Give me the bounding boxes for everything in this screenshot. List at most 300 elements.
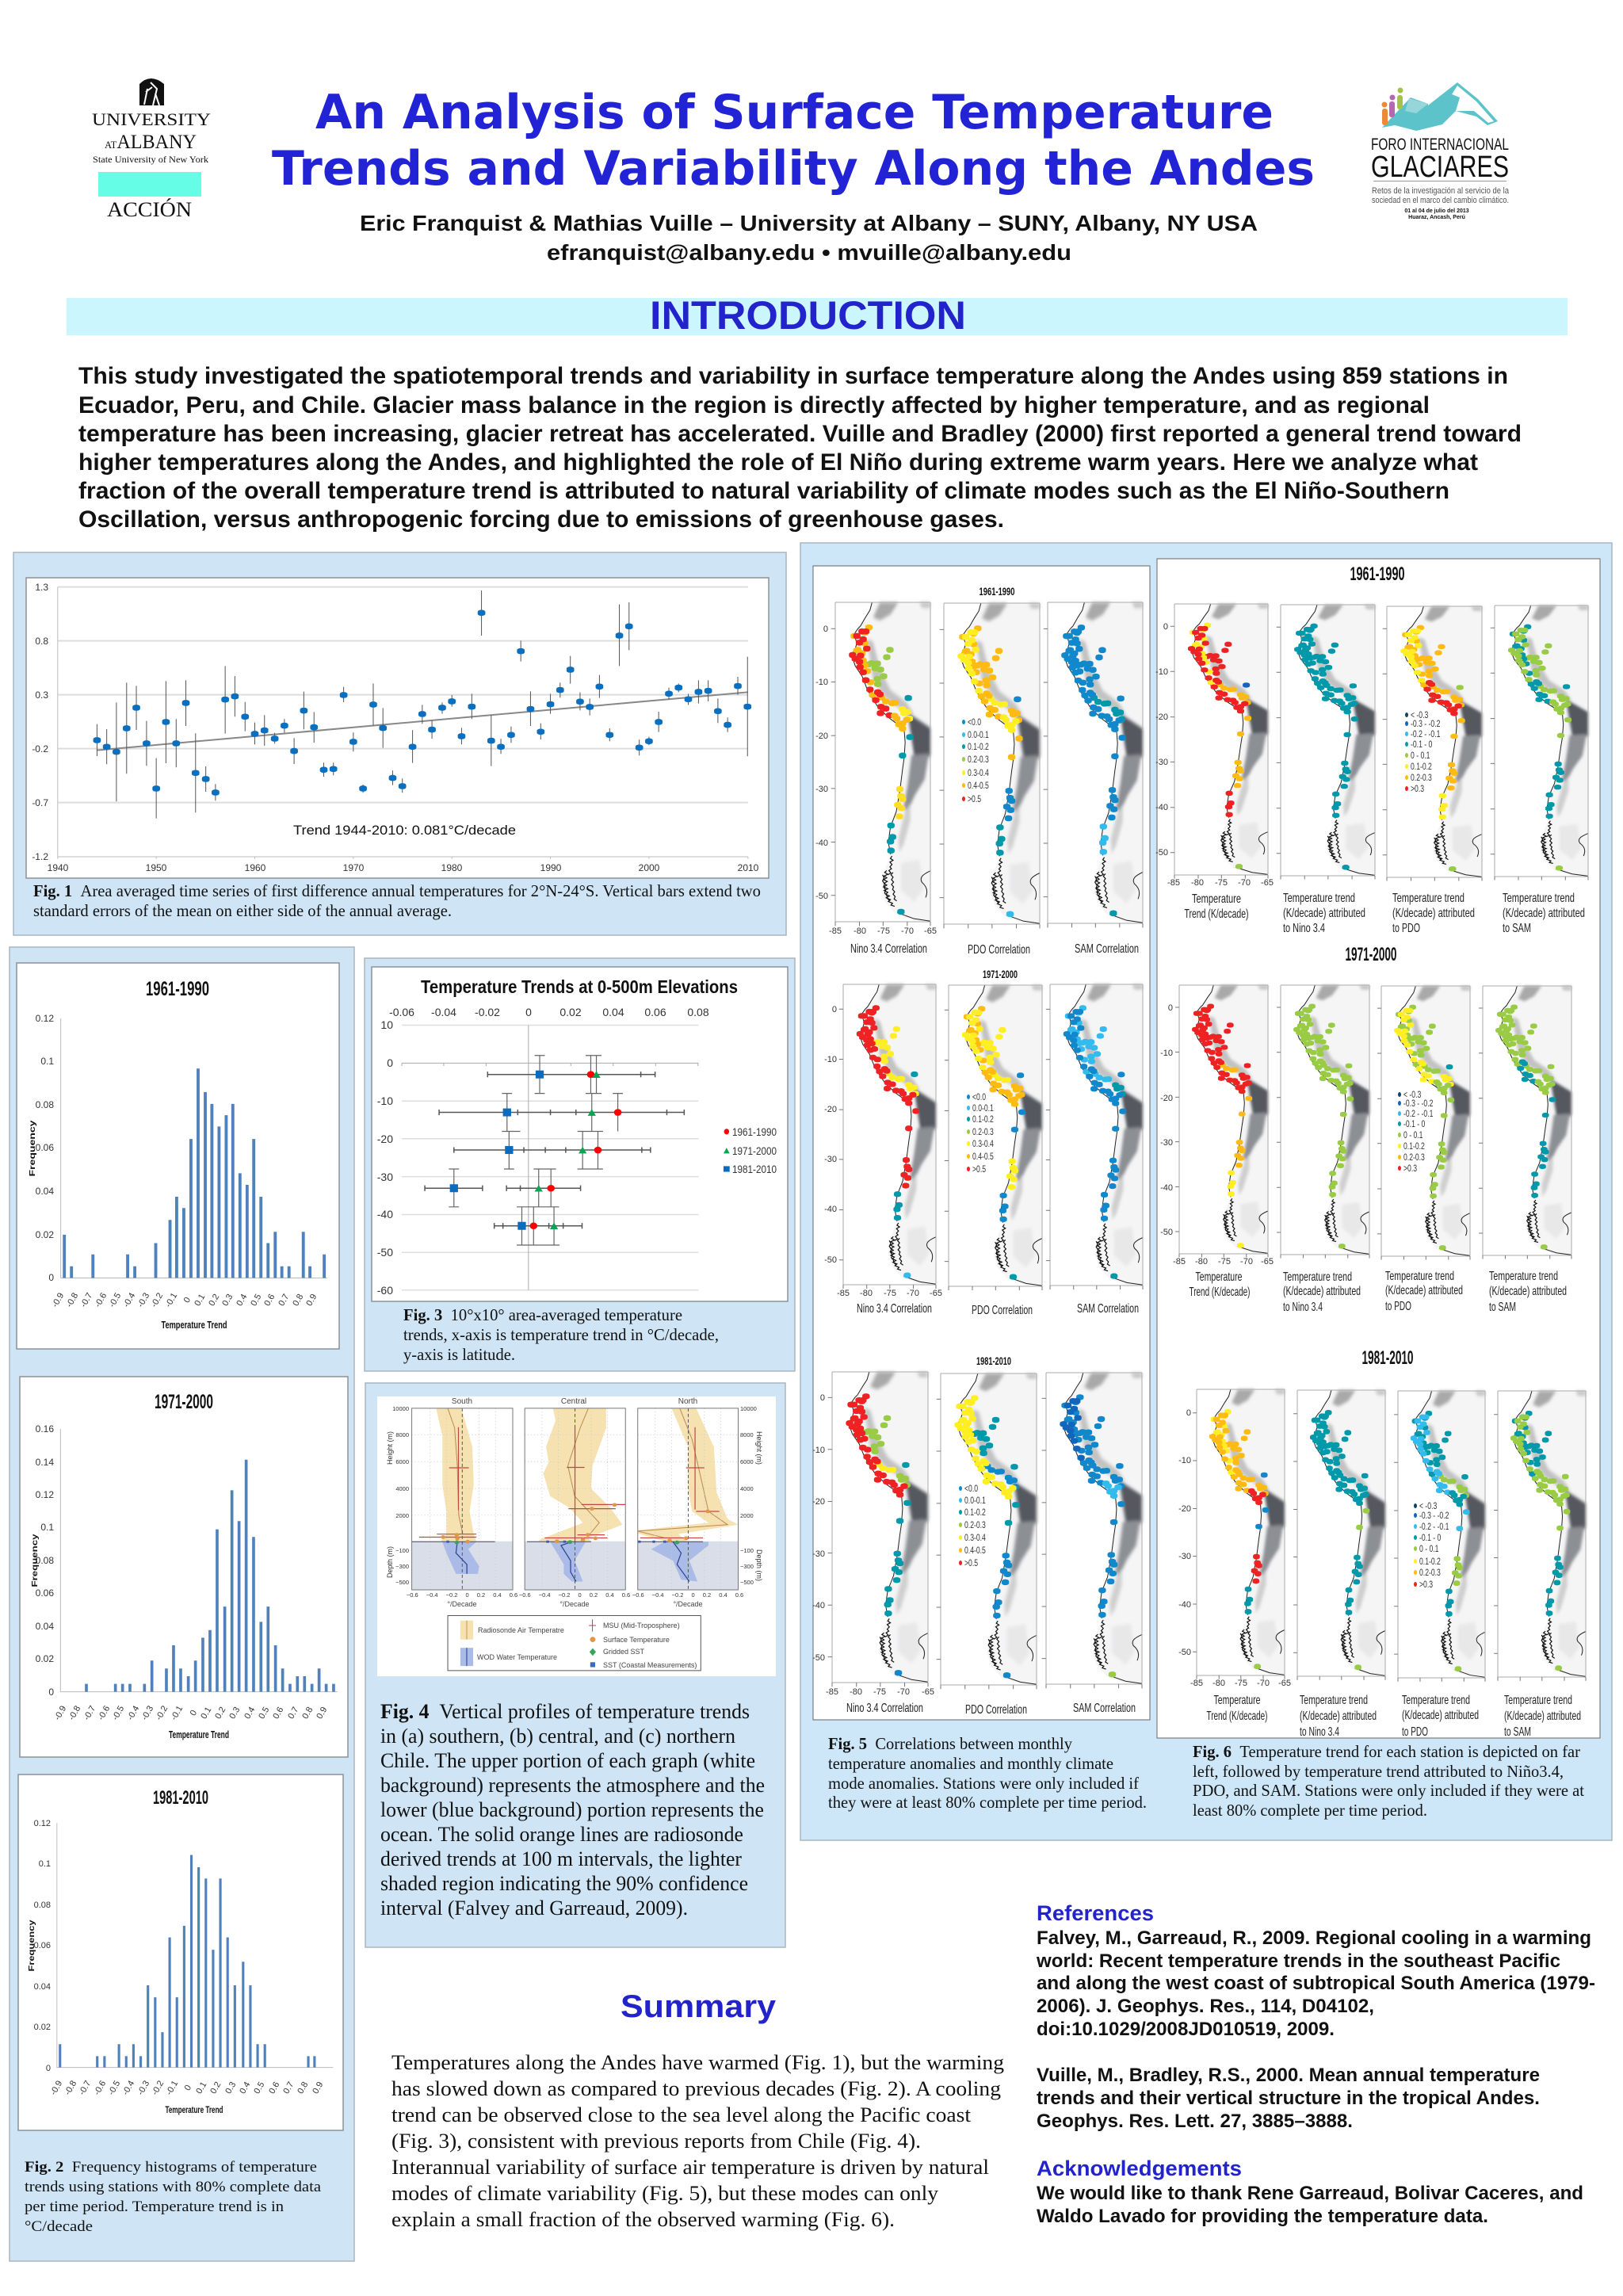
row: 1981-2010 correlations: -30 [812,1549,825,1559]
chart: vertical temperature profiles: −100 [395,1547,409,1554]
text: summary paragraph: modes of climate variability (Fig. 5), but these modes can only [391,2182,938,2205]
text: references: 2006). J. Geophys. Res., 114, D04102, [1037,1996,1374,2017]
row: 1971-2000 trends: -85 [1173,1257,1186,1266]
text: references: References [1037,1901,1154,1925]
caption: figure 5: temperature anomalies and monthly climate [828,1754,1113,1773]
chart: histogram 1981-2010: 0.1 [39,1859,51,1869]
chart: histogram 1971-2000: 0.7 [286,1706,300,1721]
text: summary paragraph: Temperatures along the Andes have warmed (Fig. 1), but the warming [391,2051,1004,2074]
chart: histogram 1981-2010: -0.6 [92,2079,108,2097]
row: 1971-2000 correlations: 0 [832,1005,837,1014]
chart: annual temperature time series: 1940 [48,862,69,873]
row: 1971-2000 correlations [824,968,1143,1317]
text: summary paragraph: has slowed down as compared to previous decades (Fig. 2). A cooling [391,2077,1001,2100]
row: 1981-2010 correlations: Nino 3.4 Correlation [846,1702,923,1715]
legend: trend: < -0.3 [1419,1502,1437,1511]
text: references: doi:10.1029/2008JD010519, 2009. [1037,2019,1335,2040]
legend: correlation [962,718,989,804]
caption: figure 5: mode anomalies. Stations were only included if [828,1774,1139,1793]
chart: histogram 1981-2010: 0.12 [34,1819,51,1828]
row: 1971-2000 correlations: -50 [824,1255,837,1265]
row: 1981-2010 trends: Trend (K/decade) [1206,1710,1268,1723]
chart: histogram 1961-1990: 0.06 [36,1142,54,1153]
chart: histogram 1981-2010: 0 [183,2084,193,2092]
legend: trend: -0.1 - 0 [1403,1120,1425,1129]
row: 1961-1990 correlations: SAM Correlation [1075,942,1139,956]
row: 1961-1990 correlations: 0 [823,625,828,634]
chart: vertical temperature profiles: −300 [395,1563,409,1570]
caption: figure 5 [828,1734,1147,1812]
chart: histogram 1961-1990: 0.9 [304,1293,319,1308]
row: 1961-1990 trends: -30 [1155,758,1168,767]
chart: annual temperature time series: 1.3 [35,582,48,593]
row: 1961-1990 trends: (K/decade) attributed [1283,907,1365,920]
row: 1961-1990 trends: to SAM [1503,922,1531,935]
row: 1971-2000 trends: -20 [1160,1094,1173,1103]
row: 1981-2010 correlations: -75 [873,1687,886,1697]
chart: histogram 1971-2000: 0.5 [257,1706,271,1721]
chart: vertical temperature profiles: 4000 [740,1485,754,1492]
caption: figure 3 [403,1305,719,1364]
text: summary paragraph: Interannual variability of surface air temperature is driven by natural [391,2156,989,2179]
chart: vertical temperature profiles: Gridded SST [603,1648,645,1656]
caption: figure 4 [380,1700,765,1920]
legend: trend: < -0.3 [1403,1091,1421,1100]
row: 1961-1990 trends: Trend (K/decade) [1184,907,1249,921]
chart: annual temperature time series: Trend 1944-2010: 0.081°C/decade [293,823,516,838]
text: introduction paragraph: Ecuador, Peru, and Chile. Glacier mass balance in the region is directly affected by higher temperature, and as regional [78,392,1430,418]
chart: histogram 1981-2010: 0.8 [296,2080,310,2095]
row: 1971-2000 trends: 0 [1168,1003,1173,1013]
panel: figure 2 [10,947,354,2261]
logo: Foro Internacional Glaciares [1371,82,1510,220]
chart: histogram 1961-1990: 0.6 [262,1293,277,1308]
chart: temperature trends by latitude: -20 [377,1133,393,1145]
row: 1981-2010 correlations: 0 [820,1393,825,1403]
legend: correlation: 0.0-0.1 [968,731,989,740]
logo: Foro Internacional Glaciares: FORO INTERNACIONAL [1371,136,1509,154]
caption: figure 2 [25,2159,322,2235]
chart: temperature trends by latitude: 10 [380,1018,393,1031]
chart: vertical temperature profiles: −0.6 −0.4 −0.2 0 0.2 0.4 0.6 [407,1591,517,1599]
heading: summary: Summary [621,1989,777,2024]
row: 1961-1990 correlations: -80 [854,926,866,936]
text: acknowledgements [1037,2157,1583,2227]
legend: trend: -0.2 - -0.1 [1411,730,1441,739]
legend: correlation: >0.5 [972,1165,986,1175]
chart: histogram 1981-2010: Frequency [28,1920,36,1972]
row: 1981-2010 correlations: PDO Correlation [965,1703,1027,1717]
chart: vertical temperature profiles: −500 [395,1579,409,1586]
chart: vertical temperature profiles: WOD Water Temperature [477,1653,557,1661]
chart: histogram 1981-2010: 0.9 [311,2080,325,2095]
row: 1961-1990 trends: -10 [1155,667,1168,677]
text: summary paragraph: explain a small fraction of the observed warming (Fig. 6). [391,2208,895,2231]
panel: figure 1 [13,552,786,935]
chart: annual temperature time series: -0.7 [32,797,48,808]
legend: correlation: >0.5 [964,1559,978,1568]
row: 1981-2010 correlations: -85 [826,1687,838,1697]
chart: vertical temperature profiles: Height (m) [386,1431,394,1465]
icon: mountain [1382,82,1498,131]
chart: histogram 1971-2000: 0.14 [36,1457,54,1468]
chart: histogram 1971-2000: 0.12 [36,1489,54,1500]
chart: histogram 1981-2010: 0.3 [223,2080,238,2095]
authors: Eric Franquist & Mathias Vuille – University at Albany – SUNY, Albany, NY USA [360,211,1258,235]
caption: figure 5: they were at least 80% complete per time period. [828,1793,1147,1812]
chart: annual temperature time series: 1970 [343,862,365,873]
chart: vertical temperature profiles: Radiosonde Air Temperatre [478,1626,564,1634]
chart: histogram 1981-2010: -0.9 [48,2079,64,2097]
row: 1971-2000 trends [1160,944,1571,1314]
row: 1981-2010 trends: Temperature trend [1402,1694,1470,1707]
chart: histogram 1981-2010: 1981-2010 [153,1787,208,1809]
chart: histogram 1961-1990 [17,963,339,1349]
chart: temperature trends by latitude: 0.08 [687,1006,709,1018]
chart: histogram 1961-1990: 0.02 [36,1229,54,1240]
chart: histogram 1971-2000: 0.1 [199,1706,213,1721]
row: 1961-1990 trends: 0 [1163,622,1168,632]
legend: trend: -0.3 - -0.2 [1419,1511,1449,1521]
chart: vertical temperature profiles: 10000 [392,1405,409,1412]
caption: figure 4: interval (Falvey and Garreaud, 2009). [380,1897,688,1920]
text: summary paragraph: (Fig. 3), consistent with previous reports from Chile (Fig. 4). [391,2130,921,2153]
text: acknowledgements: Waldo Lavado for providing the temperature data. [1037,2206,1488,2227]
logo: University at Albany [92,78,211,221]
chart: histogram 1981-2010: -0.2 [150,2079,166,2097]
row: 1961-1990 trends: Temperature [1192,892,1241,906]
chart: temperature trends by latitude [377,1006,777,1297]
title: An Analysis of Surface Temperature [315,85,1274,140]
chart: histogram 1961-1990: -0.9 [50,1291,66,1309]
legend: trend: -0.2 - -0.1 [1403,1110,1434,1119]
row: 1971-2000 trends: (K/decade) attributed [1283,1285,1361,1298]
legend: correlation: 0.4-0.5 [968,781,989,791]
text: acknowledgements: Acknowledgements [1037,2157,1242,2180]
chart: histogram 1971-2000: 0.9 [315,1706,329,1721]
legend: trend: 0.1-0.2 [1419,1557,1441,1567]
legend: trend: 0.1-0.2 [1403,1142,1425,1152]
legend: correlation: 0.4-0.5 [972,1152,994,1162]
caption: figure 1 [33,881,761,920]
panel: figure 4 [365,1383,785,1947]
title [272,85,1315,197]
row: 1981-2010 correlations: 1981-2010 [976,1354,1011,1367]
caption: figure 2: per time period. Temperature trend is in [25,2199,285,2215]
chart: histogram 1961-1990: 0.12 [36,1013,54,1024]
map: SAM correlation 1961-1990 [1044,602,1143,927]
legend: trend [1398,1091,1434,1174]
chart: temperature trends by latitude: -0.02 [475,1006,500,1018]
row: 1981-2010 trends: to PDO [1402,1725,1428,1739]
chart: histogram 1971-2000: 0 [48,1687,54,1698]
caption: figure 3: Fig. 3 10°x10° area-averaged temperature [403,1305,682,1324]
row: 1971-2000 correlations: PDO Correlation [972,1304,1033,1317]
chart: histogram 1971-2000: 0.2 [213,1706,227,1721]
row: 1981-2010 trends: to Nino 3.4 [1300,1725,1339,1739]
row: 1981-2010 trends: -70 [1257,1679,1270,1688]
chart: histogram 1981-2010: 0.06 [34,1941,51,1950]
row: 1961-1990 correlations: 1961-1990 [980,585,1015,598]
chart: histogram 1971-2000: 0 [189,1709,199,1717]
chart: vertical temperature profiles: °/Decade [447,1600,477,1608]
chart: histogram 1981-2010: -0.1 [164,2079,180,2097]
panel: figures 5 and 6 [800,543,1612,1840]
chart: annual temperature time series: -1.2 [32,851,48,862]
legend: correlation: 0.0-0.1 [964,1496,986,1506]
chart: temperature trends by latitude: -40 [377,1208,393,1221]
map: trend attributed to SAM 1971-2000 [1479,986,1571,1259]
chart: histogram 1961-1990: -0.4 [121,1291,137,1309]
text: references: Geophys. Res. Lett. 27, 3885–3888. [1037,2111,1353,2132]
legend: correlation: 0.1-0.2 [968,743,989,752]
row: 1961-1990 trends: to PDO [1392,922,1420,935]
legend: correlation: <0.0 [964,1484,978,1494]
row: 1961-1990 correlations: -30 [815,785,828,794]
chart: temperature trends by latitude: 1981-2010 [732,1163,777,1175]
row: 1961-1990 correlations: Nino 3.4 Correlation [850,942,927,956]
legend: trend: -0.1 - 0 [1419,1534,1441,1543]
row: 1961-1990 trends: -20 [1155,712,1168,722]
chart: histogram 1971-2000: 0.4 [242,1706,257,1721]
chart: histogram 1961-1990: -0.5 [107,1291,123,1309]
legend: correlation: <0.0 [972,1093,986,1102]
caption: figure 4: in (a) southern, (b) central, and (c) northern [380,1725,735,1748]
row: 1981-2010 correlations: -10 [812,1446,825,1455]
chart: temperature trends by latitude: 0.02 [559,1006,582,1018]
legend markers [724,1129,730,1172]
row: 1961-1990 trends: to Nino 3.4 [1283,922,1325,935]
map: PDO correlation 1981-2010 [937,1373,1037,1689]
legend box [448,1616,701,1671]
row: 1961-1990 correlations: -75 [877,926,890,936]
chart: vertical temperature profiles: Depth (m) [386,1546,394,1578]
map: temperature trend 1971-2000 [1175,985,1268,1257]
chart: histogram 1981-2010: 0.02 [34,2023,51,2032]
legend: correlation: 0.2-0.3 [964,1521,986,1530]
chart: histogram 1971-2000: 0.8 [300,1706,315,1721]
chart: annual temperature time series: -0.2 [32,743,48,755]
row: 1971-2000 trends: Trend (K/decade) [1189,1286,1251,1299]
logo: University at Albany: UNIVERSITY [92,109,211,129]
chart: temperature trends by latitude: 1961-1990 [732,1125,777,1138]
row: 1961-1990 trends: -80 [1191,878,1204,888]
chart: vertical temperature profiles: 6000 [395,1458,409,1465]
chart: histogram 1961-1990: -0.8 [64,1291,80,1309]
map: SAM correlation 1971-2000 [1046,984,1143,1289]
heading: introduction [67,293,1568,338]
chart: histogram 1961-1990: 0.7 [277,1293,291,1308]
heading: introduction: INTRODUCTION [650,293,966,338]
chart: temperature trends by latitude: 0.06 [644,1006,666,1018]
row: 1971-2000 trends: to Nino 3.4 [1283,1301,1323,1314]
row: 1961-1990 trends: Temperature trend [1283,892,1355,905]
title: Trends and Variability Along the Andes [272,141,1315,197]
caption: figure 4: Fig. 4 Vertical profiles of temperature trends [380,1700,750,1723]
legend: correlation: >0.5 [968,795,981,804]
row: 1961-1990 trends: -40 [1155,803,1168,812]
row: 1971-2000 trends: (K/decade) attributed [1385,1284,1463,1297]
text: references [1036,1901,1595,2132]
legend: trend: 0.2-0.3 [1411,774,1432,783]
map: trend attributed to Nino 3.4 1981-2010 [1293,1390,1385,1680]
chart: histogram 1971-2000: -0.4 [125,1704,141,1722]
row: 1961-1990 trends: -50 [1155,848,1168,858]
row: 1971-2000 correlations: -40 [824,1205,837,1214]
chart: vertical temperature profiles [386,1397,763,1671]
text: introduction paragraph: Oscillation, versus anthropogenic forcing due to emissions of greenhouse gases. [78,506,1004,533]
chart: temperature trends by latitude: -60 [377,1284,393,1297]
chart: histogram 1961-1990: -0.3 [136,1291,151,1309]
row: 1971-2000 correlations: -20 [824,1105,837,1114]
chart: histogram 1981-2010: 0.08 [34,1901,51,1910]
row: 1971-2000 trends: Temperature trend [1385,1270,1454,1283]
logo: Foro Internacional Glaciares: 01 al 04 de julio del 2013 [1404,208,1469,214]
map: trend attributed to Nino 3.4 1971-2000 [1277,985,1369,1259]
row: 1961-1990 correlations: -65 [924,926,937,936]
chart: histogram 1981-2010: 0.2 [208,2080,223,2095]
chart: vertical temperature profiles: MSU (Mid-Troposphere) [603,1622,680,1629]
row: 1961-1990 correlations: -20 [815,732,828,741]
legend: correlation [959,1484,986,1568]
chart: histogram 1981-2010 [18,1775,343,2130]
chart: histogram 1961-1990: -0.2 [149,1291,165,1309]
caption: figure 4: shaded region indicating the 90% confidence [380,1872,748,1895]
chart: histogram 1971-2000: 0.08 [36,1555,54,1566]
row: 1961-1990 trends: -65 [1261,878,1274,888]
row: 1971-2000 correlations: -70 [907,1289,919,1298]
chart: histogram 1961-1990: -0.6 [93,1291,109,1309]
text: references: world: Recent temperature trends in the southeast Pacific [1036,1950,1560,1972]
chart: histogram 1981-2010: -0.8 [63,2079,78,2097]
legend: trend [1414,1502,1449,1590]
chart: histogram 1981-2010: Temperature Trend [165,2104,223,2115]
row: 1971-2000 trends: Temperature [1195,1270,1243,1284]
text: introduction paragraph [78,363,1522,533]
text: introduction paragraph: fraction of the overall temperature trend is attributed to natural variability of climate modes such as the El Niño-Southern [78,478,1449,504]
legend: trend: < -0.3 [1411,711,1428,720]
logo: Foro Internacional Glaciares: GLACIARES [1371,151,1509,184]
row: 1961-1990 trends: 1961-1990 [1350,563,1404,585]
text: introduction paragraph: higher temperatures along the Andes, and highlighted the role of El Niño during extreme warm years. Here we analyze what [78,449,1478,476]
legend: trend: -0.2 - -0.1 [1419,1522,1449,1532]
chart: annual temperature time series [32,582,759,873]
chart: temperature trends by latitude: -0.06 [389,1006,414,1018]
legend: trend: 0.1-0.2 [1411,762,1432,772]
row: 1961-1990 trends: (K/decade) attributed [1503,907,1585,920]
caption: figure 6: Fig. 6 Temperature trend for each station is depicted on far [1193,1742,1580,1761]
row: 1971-2000 trends: 1971-2000 [1346,944,1396,965]
figure 5: correlation maps [812,566,1150,1720]
chart: annual temperature time series: 1960 [245,862,266,873]
chart: vertical temperature profiles: Surface Temperature [603,1636,670,1644]
chart: histogram 1981-2010: 0.5 [252,2080,266,2095]
chart: vertical temperature profiles: 8000 [395,1431,409,1438]
row: 1981-2010 trends: to SAM [1504,1725,1531,1739]
row: 1961-1990 trends: Temperature trend [1503,892,1575,905]
chart: temperature trends by latitude: 1971-2000 [732,1144,777,1157]
legend: trend: 0 - 0.1 [1411,751,1430,761]
row: 1981-2010 correlations: -65 [922,1687,934,1697]
text: introduction paragraph: temperature has been increasing, glacier retreat has accelerated. Vuille and Bradley (2000) first reported a general trend toward [78,421,1522,447]
text: references: Vuille, M., Bradley, R.S., 2000. Mean annual temperature [1037,2065,1540,2086]
chart: histogram 1971-2000: 0.06 [36,1587,54,1599]
chart: temperature trends by latitude: -0.04 [431,1006,456,1018]
chart: histogram 1981-2010: -0.4 [120,2079,136,2097]
chart: temperature trends by latitude: 0.04 [602,1006,624,1018]
chart: temperature trends by latitude: -10 [377,1095,393,1107]
icon: university emblem [139,78,164,105]
row: 1971-2000 correlations: -10 [824,1055,837,1064]
map: PDO correlation 1961-1990 [940,603,1040,928]
row: 1971-2000 trends: (K/decade) attributed [1489,1285,1567,1298]
caption: figure 3: trends, x-axis is temperature trend in °C/decade, [403,1325,719,1344]
row: 1961-1990 correlations [815,585,1143,957]
row: 1971-2000 trends: -10 [1160,1049,1173,1058]
legend: trend: 0.2-0.3 [1419,1568,1441,1578]
caption: figure 2: °C/decade [25,2218,93,2235]
legend: trend: -0.3 - -0.2 [1403,1099,1434,1109]
legend: correlation: 0.2-0.3 [968,755,989,765]
legend: correlation: <0.0 [968,718,981,728]
row: 1981-2010 correlations: -40 [812,1601,825,1610]
legend: correlation: 0.2-0.3 [972,1128,994,1137]
legend: correlation: 0.4-0.5 [964,1546,986,1556]
row: 1971-2000 correlations: -75 [884,1289,896,1298]
row: 1981-2010 trends: -10 [1178,1456,1191,1465]
row: 1961-1990 correlations: -40 [815,839,828,848]
legend: correlation: 0.3-0.4 [968,769,989,778]
chart: histogram 1971-2000: -0.5 [110,1704,126,1722]
chart: temperature trends by latitude: 0 [387,1056,393,1069]
map: trend attributed to PDO 1981-2010 [1394,1391,1485,1682]
caption: figure 6: PDO, and SAM. Stations were only included if they were at [1193,1781,1584,1800]
row: 1981-2010 correlations: -20 [812,1497,825,1507]
chart: histogram 1981-2010: -0.3 [136,2079,151,2097]
row: 1981-2010 trends: -85 [1190,1679,1203,1688]
chart: histogram 1961-1990: 1961-1990 [146,978,209,1000]
chart: annual temperature time series: 1980 [441,862,463,873]
chart: annual temperature time series: 0.3 [35,690,48,701]
panel: figure 3: Temperature Trends at 0-500m Elevations [421,976,738,997]
row: 1981-2010 trends: Temperature [1214,1694,1261,1707]
caption: figure 6 [1193,1742,1584,1820]
legend: trend: -0.3 - -0.2 [1411,720,1441,729]
caption: figure 1: standard errors of the mean on either side of the annual average. [33,901,452,920]
row: 1981-2010 correlations: SAM Correlation [1073,1702,1136,1715]
chart: annual temperature time series: 1990 [540,862,562,873]
chart: histogram 1961-1990: Temperature Trend [162,1319,227,1331]
authors [360,211,1258,265]
logo: Foro Internacional Glaciares: Huaraz, Ancash, Perú [1408,215,1465,220]
chart: histogram 1961-1990: 0.04 [36,1186,54,1197]
logo: Foro Internacional Glaciares: Retos de la investigación al servicio de la [1372,186,1510,196]
caption: figure 4: derived trends at 100 m intervals, the lighter [380,1847,742,1870]
text: references: trends and their vertical structure in the tropical Andes. [1037,2088,1540,2109]
legend: trend: 0 - 0.1 [1403,1131,1423,1140]
text: summary paragraph: trend can be observed close to the sea level along the Pacific coast [391,2103,972,2126]
chart: vertical temperature profiles: 6000 [740,1458,754,1465]
chart: histogram 1981-2010: -0.5 [106,2079,122,2097]
row: 1981-2010 trends: (K/decade) attributed [1300,1710,1377,1723]
row: 1961-1990 correlations: -85 [829,926,842,936]
chart: histogram 1961-1990: 0 [48,1272,54,1283]
legend: trend: >0.3 [1411,785,1424,794]
row: 1971-2000 correlations: -65 [930,1289,942,1298]
chart: vertical temperature profiles: −0.6 −0.4 −0.2 0 0.2 0.4 0.6 [519,1591,630,1599]
chart: histogram 1971-2000: -0.2 [154,1704,170,1722]
chart: histogram 1961-1990: 0.2 [207,1293,221,1308]
